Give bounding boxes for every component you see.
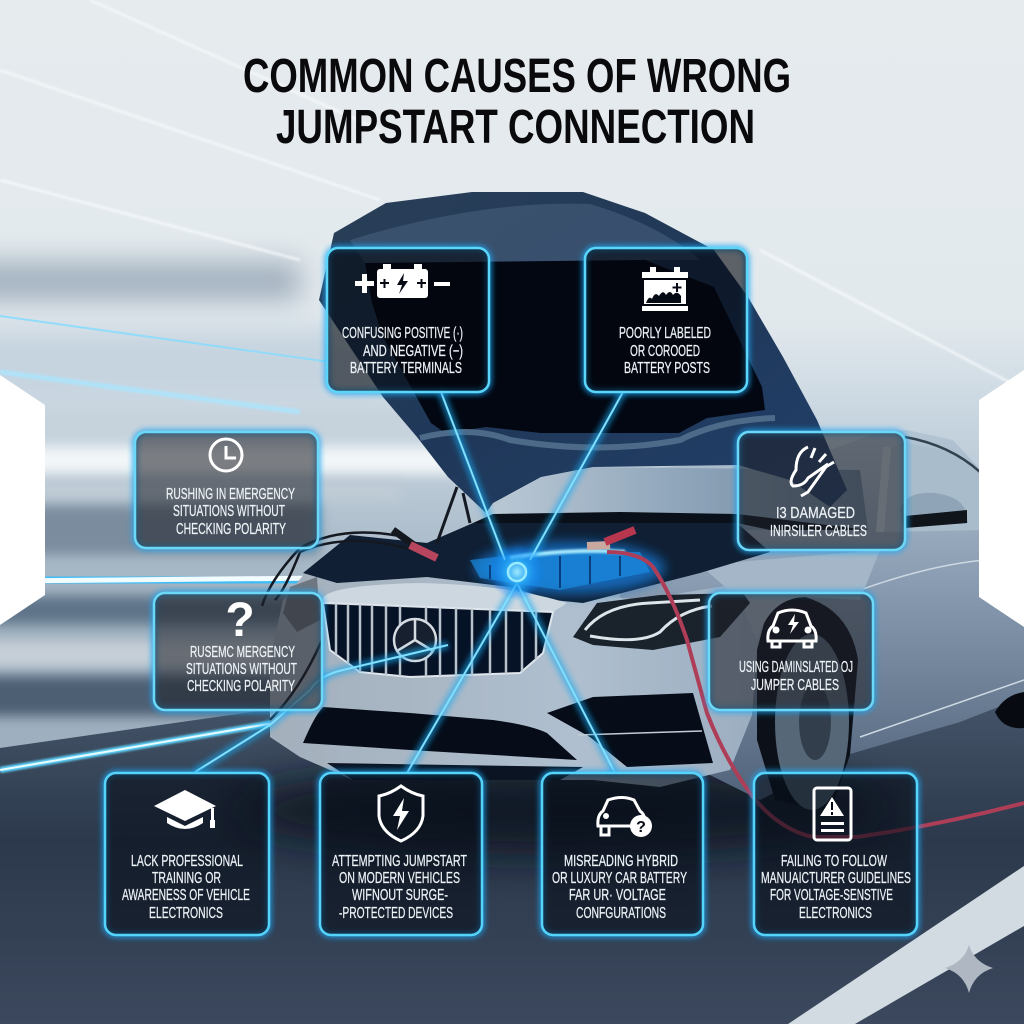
panel: modern vehicles without surge protection: ON MODERN VEHICLES bbox=[339, 870, 460, 887]
car body bbox=[270, 430, 1024, 812]
red clamp bbox=[587, 530, 635, 546]
icon: sparking cable clamp bbox=[791, 447, 834, 496]
panel: confusing battery terminals: CONFUSING POSITIVE (·) bbox=[342, 325, 463, 342]
panel: modern vehicles without surge protection bbox=[320, 773, 482, 935]
panel: using damaged jumper cables: JUMPER CABLES bbox=[751, 677, 839, 694]
front fascia bbox=[270, 555, 880, 787]
panel: modern vehicles without surge protection: WIFNOUT SURGE- bbox=[352, 887, 448, 904]
icon: clock bbox=[210, 439, 242, 471]
panel: poorly labeled posts: OR COROOED bbox=[630, 343, 700, 360]
panel: lack of training bbox=[105, 773, 269, 935]
panel: failing to follow manufacturer guidelines: ELECTRONICS bbox=[799, 905, 872, 922]
icon: corroded battery bbox=[642, 267, 688, 311]
lower air intakes bbox=[303, 693, 713, 780]
icon: warning document bbox=[814, 788, 851, 840]
wheel arch and tyre bbox=[757, 597, 858, 812]
panel: damaged insulated cables: I3 DAMAGED bbox=[776, 505, 855, 522]
road bbox=[0, 690, 1024, 1024]
jumper cables bbox=[262, 530, 1024, 837]
black cable bbox=[262, 532, 420, 720]
panel: using damaged jumper cables bbox=[709, 593, 873, 710]
panel: failing to follow manufacturer guidelines: MANUAICTURER GUIDELINES bbox=[761, 870, 911, 887]
icon: battery with plus and minus bbox=[355, 264, 450, 298]
hood rib bbox=[420, 418, 775, 448]
door crease bbox=[860, 560, 1024, 737]
panel: misreading hybrid or luxury battery bbox=[542, 773, 703, 935]
panel: misreading hybrid or luxury battery: OR LUXURY CAR BATTERY bbox=[552, 870, 687, 887]
car side and roof bbox=[600, 430, 1024, 800]
red cable bbox=[607, 552, 1024, 837]
windshield bbox=[483, 467, 868, 530]
icon: car with bolt bbox=[768, 610, 816, 647]
panel: misreading hybrid or luxury battery: CONFGURATIONS bbox=[576, 905, 666, 922]
panel: rushing emergency question bbox=[154, 593, 322, 710]
panel: confusing battery terminals bbox=[327, 248, 489, 392]
connector lines bbox=[195, 392, 623, 773]
battery glow area bbox=[470, 542, 665, 594]
panel: lack of training: TRAINING OR bbox=[152, 870, 221, 887]
hood lip bbox=[323, 583, 567, 612]
black clamp bbox=[393, 530, 437, 558]
panel: misreading hybrid or luxury battery: MISREADING HYBRID bbox=[564, 853, 678, 870]
panel: rushing in emergency: SITUATIONS WITHOUT bbox=[173, 503, 285, 520]
white side notches bbox=[0, 370, 1024, 627]
panel: poorly labeled posts: POORLY LABELED bbox=[619, 325, 711, 342]
icon: car with question badge bbox=[598, 798, 652, 837]
fender bbox=[700, 550, 880, 640]
panel: lack of training: ELECTRONICS bbox=[149, 905, 223, 922]
panel: failing to follow manufacturer guidelines: FAILING TO FOLLOW bbox=[781, 853, 887, 870]
panel: rushing in emergency: RUSHING IN EMERGENCY bbox=[166, 486, 295, 503]
light streaks bbox=[0, 316, 330, 770]
background: sky and motion blur bbox=[0, 0, 1024, 760]
hood bbox=[319, 192, 847, 543]
panel: rushing emergency question: SITUATIONS WITHOUT bbox=[186, 661, 297, 678]
panel: misreading hybrid or luxury battery: FAR UR· VOLTAGE bbox=[569, 887, 666, 904]
mirror bbox=[900, 493, 968, 528]
panel: confusing battery terminals: BATTERY TERMINALS bbox=[350, 360, 462, 377]
hood strut bbox=[437, 487, 470, 543]
rear wheel hint bbox=[995, 692, 1024, 728]
panel: rushing emergency question: CHECKING POLARITY bbox=[187, 678, 295, 695]
title bbox=[243, 50, 791, 154]
panel: using damaged jumper cables: USING DAMINSLATED OJ bbox=[739, 659, 853, 676]
panel: modern vehicles without surge protection: -PROTECTED DEVICES bbox=[339, 905, 453, 922]
panel: damaged insulated cables bbox=[738, 432, 905, 550]
grille bbox=[323, 600, 553, 680]
icon: graduation cap bbox=[154, 790, 216, 829]
hood upper highlight bbox=[350, 204, 700, 263]
panel: lack of training: LACK PROFESSIONAL bbox=[131, 853, 243, 870]
panel: rushing emergency question: RUSEMC MERGENCY bbox=[190, 644, 295, 661]
engine bay bbox=[303, 523, 770, 603]
icon: shield with bolt bbox=[379, 786, 423, 841]
panel: modern vehicles without surge protection: ATTEMPTING JUMPSTART bbox=[332, 853, 467, 870]
panel: poorly labeled posts: BATTERY POSTS bbox=[624, 360, 710, 377]
panel: damaged insulated cables: INIRSILER CABLES bbox=[770, 523, 867, 540]
headlights bbox=[283, 577, 750, 650]
panel: rushing in emergency: CHECKING POLARITY bbox=[176, 521, 286, 538]
cowl and wipers bbox=[473, 512, 868, 530]
title: JUMPSTART CONNECTION bbox=[276, 101, 755, 154]
side windows bbox=[880, 437, 985, 532]
panel: poorly labeled posts bbox=[585, 248, 747, 392]
title: COMMON CAUSES OF WRONG bbox=[243, 50, 791, 103]
panel: confusing battery terminals: AND NEGATIVE (−) bbox=[363, 343, 463, 360]
hood underside bbox=[365, 260, 765, 433]
panel: lack of training: AWARENESS OF VEHICLE bbox=[122, 887, 250, 904]
panel: failing to follow manufacturer guidelines bbox=[754, 773, 917, 935]
panel: failing to follow manufacturer guidelines: FOR VOLTAGE-SENSTIVE bbox=[770, 887, 893, 904]
icon: car with question badge: ? bbox=[636, 819, 646, 836]
icon: question mark: ? bbox=[225, 594, 255, 647]
panel: rushing in emergency bbox=[135, 432, 318, 548]
